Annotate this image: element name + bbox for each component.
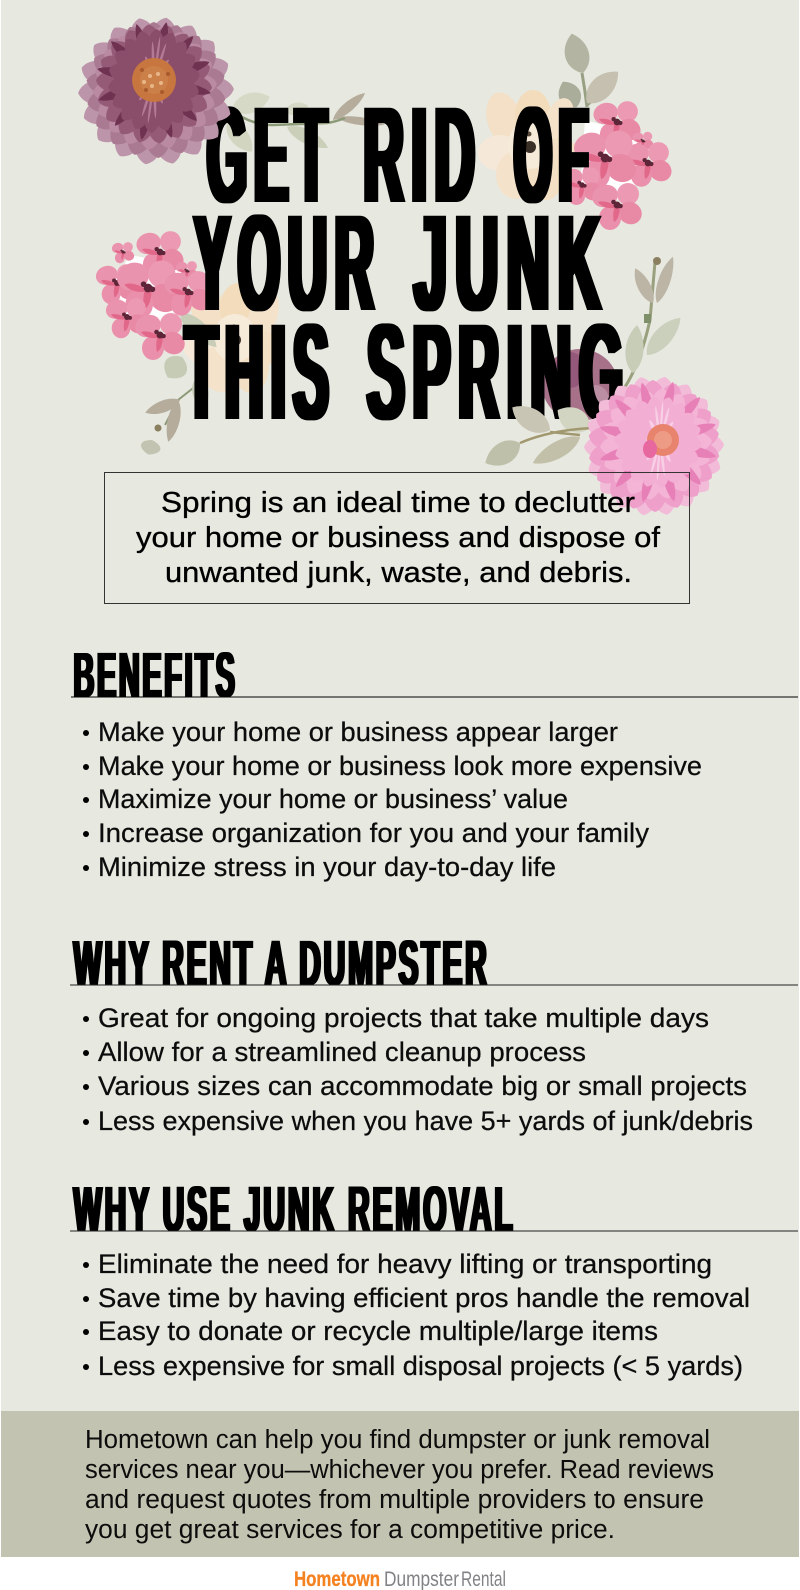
section: benefits: BENEFITS (74, 639, 238, 711)
section: why rent a dumpster (70, 927, 798, 1136)
floral: cream flower left (183, 282, 285, 393)
title: YOUR (194, 187, 382, 340)
footer text: services near you—whichever you prefer. Read reviews (85, 1456, 714, 1484)
title: RID (364, 79, 482, 232)
floral: pink hydrangea cluster top right (560, 99, 675, 230)
logo: Hometown Dumpster Rental (294, 1568, 506, 1590)
floral: sprig right (623, 255, 687, 390)
floral: pink hydrangea cluster left (93, 229, 215, 360)
footer text: Hometown can help you find dumpster or junk removal (85, 1426, 710, 1454)
list: benefits: Make your home or business look more expensive (98, 751, 702, 781)
intro box (104, 472, 690, 604)
list: dumpster (83, 1003, 753, 1136)
title: OF (514, 79, 595, 232)
footer text: you get great services for a competitive price. (85, 1516, 615, 1544)
intro text (136, 487, 660, 589)
title (185, 79, 631, 449)
title: GET (207, 79, 334, 232)
floral: cream flower top (478, 89, 580, 200)
section: benefits (71, 639, 798, 882)
title: THIS (185, 296, 336, 449)
list: benefits: Maximize your home or business’ value (98, 784, 568, 814)
floral: sprig lower left (139, 307, 223, 457)
list: dumpster: Various sizes can accommodate big or small projects (98, 1071, 747, 1101)
floral: plum flower top left (67, 6, 245, 176)
footer text: and request quotes from multiple providers to ensure (85, 1486, 704, 1514)
floral: sprig top left (221, 87, 385, 157)
list: dumpster: Allow for a streamlined cleanup process (98, 1037, 586, 1067)
intro text: your home or business and dispose of (136, 522, 660, 554)
list: dumpster: Less expensive when you have 5+ yards of junk/debris (98, 1106, 753, 1136)
floral: plum flower behind title (542, 349, 618, 421)
list: benefits: Increase organization for you and your family (98, 818, 650, 848)
section: why use junk removal (70, 1173, 798, 1381)
list: dumpster: Great for ongoing projects that take multiple days (98, 1003, 709, 1033)
intro text: Spring is an ideal time to declutter (161, 487, 636, 519)
list: junk removal: Easy to donate or recycle multiple/large items (98, 1316, 658, 1346)
list: junk removal: Eliminate the need for heavy lifting or transporting (98, 1249, 712, 1279)
list: benefits (83, 717, 702, 882)
list: junk removal (83, 1249, 750, 1381)
floral: sprig top right (553, 30, 625, 113)
floral: sprig bottom (480, 398, 595, 473)
list: junk removal: Save time by having efficient pros handle the removal (98, 1283, 750, 1313)
list: benefits: Make your home or business appear larger (98, 717, 618, 747)
footer text (85, 1426, 714, 1544)
footer band (1, 1411, 799, 1557)
list: junk removal: Less expensive for small disposal projects (< 5 yards) (98, 1351, 743, 1381)
floral: pink flower bottom right (573, 365, 735, 527)
intro text: unwanted junk, waste, and debris. (165, 557, 632, 589)
list: benefits: Minimize stress in your day-to-day life (98, 852, 556, 882)
